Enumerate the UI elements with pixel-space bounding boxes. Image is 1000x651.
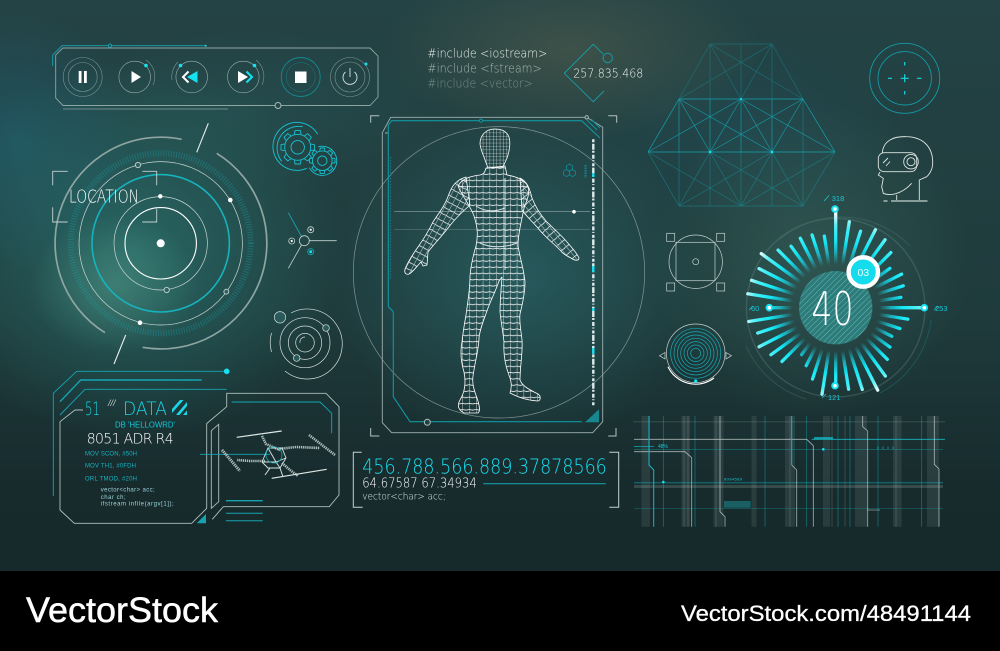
coordinates readout: [353, 452, 619, 507]
icon: tri-axis target: [288, 213, 337, 268]
stop button: [281, 58, 320, 96]
data-stream grid: 0 0 0 0: [877, 445, 895, 450]
icon: gears: [273, 122, 337, 175]
data-stream grid: 8094589: [724, 476, 743, 482]
code include lines: #include <fstream>: [427, 61, 542, 75]
diamond readout: 257.835.468: [573, 66, 643, 81]
grey vertical bands: [642, 416, 939, 527]
location label with brackets: LOCATION: [69, 187, 139, 208]
location label with brackets: [53, 171, 157, 222]
icon: orbit rings: [270, 309, 342, 379]
panel: data readout: [53, 368, 339, 523]
data heading: DATA: [123, 398, 167, 420]
forward button: [228, 60, 264, 93]
panel: body scan frame: [353, 116, 645, 436]
icon: head with VR visor: [878, 137, 933, 201]
icon: square target: [667, 233, 725, 291]
coordinates readout: 456.788.566.889.37878566: [362, 454, 607, 478]
data heading: 51: [85, 398, 100, 420]
coordinates readout: 64.67587 67.34934: [362, 477, 477, 492]
data heading: [85, 398, 187, 420]
diamond readout: [564, 44, 643, 102]
data text block: ifstream infile(argv[1]);: [101, 502, 174, 508]
icon: hexagon cluster: [564, 164, 586, 178]
arm left: [405, 177, 470, 274]
control bar: [53, 44, 378, 109]
data text block: ORL TMOD, #20H: [85, 477, 137, 483]
code include lines: #include <iostream>: [427, 47, 547, 61]
gauge labels: [749, 194, 948, 402]
radial gauge: [746, 194, 948, 402]
gauge hatched centre: [799, 271, 872, 344]
data heading: ///: [107, 398, 117, 408]
code include lines: [427, 47, 547, 90]
gauge nodes: [766, 205, 928, 390]
footer bar: VectorStock: [26, 591, 219, 630]
data text block: [85, 421, 175, 508]
data-stream grid: 48%: [658, 444, 669, 450]
gauge rings: [746, 217, 931, 399]
drone wireframe: [200, 431, 335, 478]
badge 03: [849, 257, 878, 287]
arm right: [520, 178, 579, 260]
footer bar: VectorStock.com/48491144: [681, 601, 971, 626]
gauge labels: 318: [832, 194, 844, 203]
location radar: [53, 123, 267, 364]
data text block: vector<char> acc;: [101, 488, 155, 494]
gauge labels: 121: [828, 393, 841, 402]
icon: concentric rings dial: [660, 324, 732, 384]
pause button: [63, 58, 102, 96]
gauge value: 40: [812, 282, 854, 336]
power button: [330, 58, 370, 96]
data text block: 8051 ADR R4: [87, 431, 174, 447]
rewind button: [172, 61, 208, 93]
human wireframe: [405, 129, 579, 413]
play button: [119, 60, 155, 93]
data text block: char ch;: [101, 495, 126, 501]
footer bar: [0, 571, 1000, 651]
gauge labels: 60: [751, 304, 759, 313]
gauge labels: 253: [935, 304, 948, 313]
badge 03: 03: [857, 267, 869, 279]
gauge spokes: [748, 210, 924, 394]
icon: crosshair target: [870, 43, 940, 113]
data text block: DB 'HELLOWRD': [115, 421, 175, 430]
coordinates readout: vector<char> acc;: [362, 491, 446, 502]
torso and legs: [458, 166, 540, 413]
code include lines: #include <vector>: [427, 76, 533, 90]
geometric hexagon diagram: [648, 44, 835, 206]
data-stream grid: [633, 416, 945, 527]
data text block: MOV TH1, #0FDH: [85, 464, 136, 470]
head: [480, 129, 510, 168]
scale bar: [592, 139, 594, 406]
data text block: MOV SCON, #50H: [85, 452, 137, 458]
